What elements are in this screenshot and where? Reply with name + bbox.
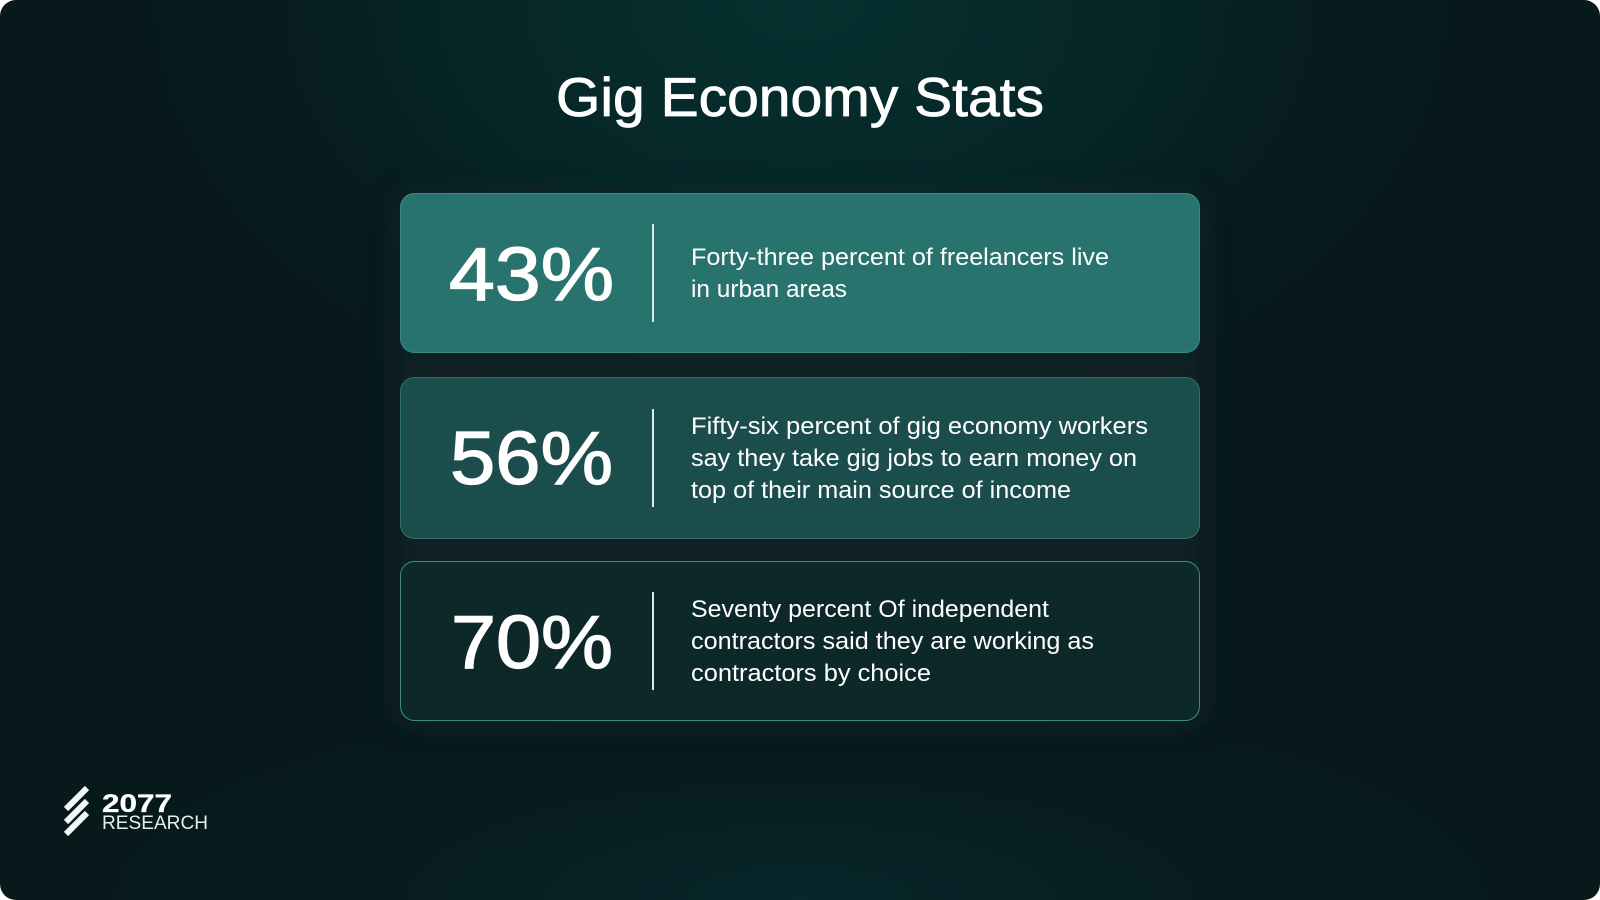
stat number 56%: 56% — [450, 416, 613, 500]
description: say they take gig jobs to earn money on — [691, 445, 1137, 472]
description: Seventy percent Of independent — [691, 596, 1049, 623]
description: contractors said they are working as — [691, 628, 1094, 655]
description — [691, 413, 1148, 504]
description — [691, 596, 1094, 687]
description: Fifty-six percent of gig economy workers — [691, 413, 1148, 440]
icon: logo stripes — [66, 788, 87, 834]
stat number 70%: 70% — [451, 600, 613, 684]
panel: stat 43% — [400, 194, 1200, 352]
logo wordmark: 2077 — [102, 790, 172, 818]
description: top of their main source of income — [691, 477, 1071, 504]
description — [691, 244, 1109, 303]
description: in urban areas — [691, 276, 847, 303]
title: Gig Economy Stats — [556, 66, 1044, 128]
divider — [652, 409, 654, 507]
panel: stat 70% — [400, 562, 1200, 720]
stat number 43%: 43% — [449, 232, 614, 316]
description: Forty-three percent of freelancers live — [691, 244, 1109, 271]
description: contractors by choice — [691, 660, 931, 687]
logo subtitle: RESEARCH — [102, 813, 208, 834]
divider — [652, 224, 654, 322]
panel: stat 56% — [400, 378, 1200, 538]
logo: 2077 Research — [66, 788, 208, 834]
divider — [652, 592, 654, 690]
